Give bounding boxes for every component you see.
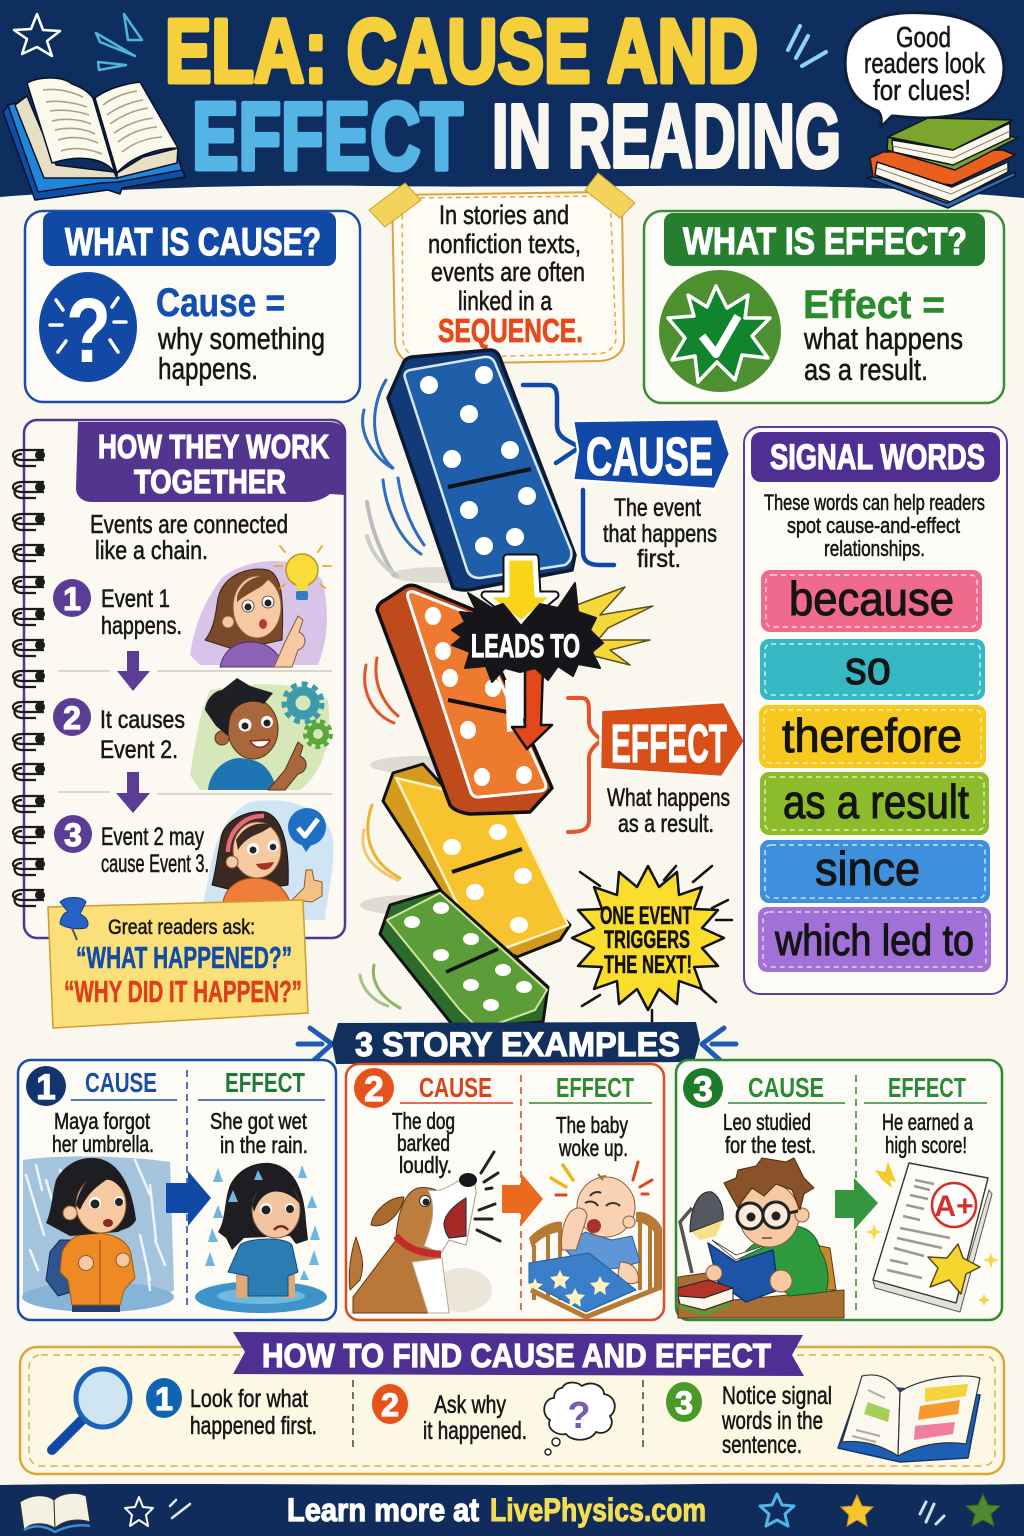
footer icon: blue star — [760, 1494, 794, 1526]
step 1: happened first. — [190, 1412, 317, 1440]
step 2 — [53, 698, 185, 764]
number badge 2: 2 — [364, 1070, 384, 1109]
footer link text: LivePhysics.com — [490, 1492, 706, 1528]
number badge 1: 1 — [36, 1068, 56, 1107]
connector: effect bracket — [568, 698, 602, 832]
domino: green — [380, 890, 548, 1030]
text: example 3: He earned a — [882, 1109, 973, 1135]
text: example 1: Maya forgot — [54, 1108, 150, 1134]
illustration: leo studying — [678, 1158, 844, 1318]
motion arcs — [360, 380, 424, 1008]
text: signal intro: spot cause-and-effect — [787, 513, 960, 538]
text: cause description — [603, 494, 717, 573]
illustration: barking dog — [349, 1152, 500, 1313]
step 3: Event 2 may — [101, 823, 204, 851]
pill: which led to: which led to — [774, 916, 974, 965]
footer icon: star outline — [125, 1497, 153, 1526]
leads to burst — [452, 583, 603, 682]
pill: since — [760, 840, 990, 903]
icon: thought bubble: ? — [567, 1395, 591, 1437]
callout: speech bubble: for clues! — [873, 75, 971, 107]
text: effect definition — [803, 283, 963, 387]
text: cause description: first. — [637, 545, 681, 573]
section heading: 3 story examples: 3 STORY EXAMPLES — [355, 1026, 680, 1064]
illustration: crying baby in crib — [527, 1162, 662, 1317]
text: effect description — [607, 784, 730, 838]
arrow: red down arrow — [505, 668, 552, 749]
title — [165, 2, 841, 190]
number badge 3: 3 — [693, 1070, 713, 1109]
label: effect: EFFECT — [611, 714, 727, 774]
icon: check burst — [659, 270, 781, 392]
arrow: step 1 to 2 — [117, 651, 150, 691]
pill: so: so — [845, 641, 891, 694]
header band — [0, 0, 1024, 198]
callout: sequence note: In stories and — [439, 200, 569, 230]
footer link text — [287, 1492, 706, 1528]
illustration: graded paper — [866, 1162, 999, 1312]
illustration: thinking girl — [190, 546, 331, 667]
label: cause and effect: CAUSE — [85, 1067, 157, 1098]
footer icon: slash — [170, 1500, 190, 1518]
callout: one event triggers the next: ONE EVENT — [600, 902, 692, 930]
arrow: yellow down arrow — [485, 558, 555, 623]
text: example 1: her umbrella. — [52, 1131, 154, 1157]
label: cause and effect: EFFECT — [556, 1072, 634, 1103]
text: effect description: What happens — [607, 784, 730, 812]
icon: blue sparks left — [96, 14, 142, 70]
text: effect definition: as a result. — [804, 352, 928, 387]
domino: yellow — [383, 764, 570, 957]
callout: sequence note: nonfiction texts, — [428, 229, 581, 259]
step 2 — [372, 1384, 527, 1445]
callout: sequence note — [369, 173, 635, 364]
heading: how they work together: TOGETHER — [134, 463, 286, 500]
label: cause and effect: EFFECT — [225, 1067, 305, 1098]
illustration: maya in rain — [22, 1156, 174, 1312]
number badge 2 — [354, 1068, 394, 1109]
heading: how they work together — [76, 422, 346, 502]
connector: cause bracket — [523, 385, 614, 565]
step 3: sentence. — [722, 1431, 802, 1459]
step 1: happens. — [101, 612, 182, 640]
illustration: maya wet — [195, 1163, 327, 1313]
step 2: It causes — [100, 706, 185, 734]
pill: because: because — [789, 572, 954, 625]
step 1: 1 — [155, 1381, 173, 1417]
text: example 3: Leo studied — [723, 1109, 811, 1135]
title: ELA: CAUSE AND — [165, 2, 758, 102]
text: cause definition: Cause = — [156, 281, 285, 325]
text: chain intro: Events are connected — [90, 509, 288, 539]
text: signal intro — [764, 490, 985, 561]
text: effect definition: Effect = — [803, 283, 945, 327]
arrow: step 2 to 3 — [116, 772, 150, 813]
heading: what is cause — [43, 212, 336, 266]
leads to burst: LEADS TO — [471, 628, 580, 664]
callout: speech bubble — [845, 13, 1004, 128]
text: example 2: The baby — [556, 1112, 628, 1138]
step 1 — [53, 579, 182, 640]
text: effect description: as a result. — [618, 810, 714, 838]
text: cause definition: why something — [157, 321, 325, 356]
step 2: 2 — [381, 1387, 399, 1423]
icon: open book — [3, 78, 185, 200]
step 3 — [666, 1382, 832, 1459]
footer icon: slashes — [920, 1502, 944, 1524]
arrow: example 2 — [502, 1173, 543, 1226]
domino: blue — [388, 350, 575, 590]
panel: how they work together — [13, 420, 346, 938]
icon: yellow sparks — [574, 587, 653, 665]
footer link text: Learn more at — [287, 1492, 479, 1528]
step 3: 3 — [64, 817, 82, 853]
callout: one event triggers the next: TRIGGERS — [604, 926, 690, 954]
heading: what is cause: WHAT IS CAUSE? — [65, 221, 321, 264]
label: effect — [600, 702, 745, 777]
step 3: Notice signal — [722, 1382, 832, 1410]
text: example 3: high score! — [885, 1132, 967, 1158]
panel: example 1 — [18, 1060, 336, 1320]
pill: therefore — [759, 705, 986, 768]
footer icon: book — [20, 1493, 90, 1532]
text: example 1: in the rain. — [220, 1132, 308, 1158]
heading: what is effect: WHAT IS EFFECT? — [683, 221, 967, 263]
step 3: words in the — [721, 1407, 823, 1435]
number badge 3 — [683, 1068, 723, 1109]
illustration: thumbs up girl — [200, 800, 333, 920]
step 3: 3 — [675, 1385, 693, 1421]
pill: which led to — [758, 907, 991, 972]
label: cause and effect: EFFECT — [888, 1072, 966, 1103]
heading: signal words — [751, 432, 1000, 482]
arrow: yellow down arrow fill — [485, 558, 555, 623]
callout: sequence note: linked in a — [458, 286, 553, 316]
text: example 3: for the test. — [725, 1132, 816, 1158]
callout: great readers ask note — [48, 898, 308, 1028]
footer icon: yellow star — [841, 1495, 873, 1526]
callout: speech bubble: readers look — [864, 48, 985, 80]
text: example 1 — [52, 1108, 308, 1158]
heading: what is effect — [664, 213, 985, 266]
label: cause: CAUSE — [586, 427, 713, 487]
text: example 1: She got wet — [210, 1108, 307, 1134]
pill: so — [760, 639, 985, 700]
icon: question mark: ? — [66, 280, 111, 382]
title: EFFECT — [192, 83, 463, 190]
icon: push pin — [60, 898, 88, 940]
icon: blue sparks right — [788, 26, 826, 66]
step 1 — [146, 1378, 317, 1440]
text: example 3 — [723, 1109, 973, 1158]
label: cause and effect: CAUSE — [748, 1072, 824, 1103]
heading: how they work together: HOW THEY WORK — [98, 428, 329, 465]
label: cause and effect — [71, 1067, 325, 1100]
callout: great readers ask note: Great readers ask: — [108, 916, 255, 939]
icon: book with highlights — [838, 1375, 980, 1462]
panel: example 2 — [346, 1064, 664, 1320]
text: chain intro: like a chain. — [95, 535, 208, 565]
arrow: example 1 — [166, 1171, 211, 1226]
panel: what is cause — [25, 211, 360, 402]
step 3: cause Event 3. — [101, 850, 209, 878]
text: example 2 — [392, 1108, 628, 1178]
icon: stack of books — [867, 118, 1017, 208]
title: IN READING — [492, 87, 841, 187]
step 2: Event 2. — [100, 736, 178, 764]
step 2: Ask why — [434, 1391, 506, 1419]
step 1: Look for what — [190, 1385, 308, 1413]
icon: star outline — [14, 14, 60, 56]
text: example 2: loudly. — [399, 1152, 452, 1178]
illustration: graded paper: A+ — [934, 1190, 974, 1223]
label: cause and effect — [400, 1072, 652, 1103]
number badge 1 — [26, 1066, 66, 1107]
text: cause description: that happens — [603, 520, 717, 548]
callout: one event triggers the next — [572, 866, 732, 1022]
text: cause definition: happens. — [158, 351, 258, 386]
text: signal intro: relationships. — [824, 536, 925, 561]
label: cause — [573, 419, 730, 489]
text: example 2: woke up. — [558, 1135, 628, 1161]
text: cause description: The event — [614, 494, 701, 522]
callout: great readers ask note: “WHY DID IT HAPPEN?” — [64, 974, 302, 1009]
step 2: 2 — [63, 700, 81, 736]
panel: signal words — [744, 427, 1007, 994]
step 1: 1 — [63, 581, 81, 617]
step 1: Event 1 — [101, 585, 170, 613]
callout: sequence note: events are often — [431, 257, 585, 287]
callout: one event triggers the next: THE NEXT! — [604, 951, 692, 979]
icon: magnifier — [52, 1369, 130, 1450]
text: chain intro — [90, 509, 288, 565]
panel: example 3 — [676, 1060, 1002, 1320]
notebook spirals — [13, 450, 45, 906]
text: example 2: barked — [397, 1130, 450, 1156]
arrow: example 3 — [835, 1178, 878, 1230]
pill: as a result: as a result — [783, 775, 969, 828]
panel: how to find cause and effect — [20, 1332, 1004, 1474]
heading banner: HOW TO FIND CAUSE AND EFFECT — [262, 1337, 771, 1374]
callout: speech bubble: Good — [896, 22, 951, 54]
label: cause and effect — [728, 1072, 987, 1103]
footer icon: green star — [966, 1494, 1000, 1526]
text: effect definition: what happens — [803, 321, 963, 356]
label: cause and effect: CAUSE — [419, 1072, 492, 1103]
illustration: pointing boy — [190, 678, 331, 790]
pill: therefore: therefore — [782, 709, 962, 762]
step 2: it happened. — [423, 1417, 527, 1445]
icon: question mark — [39, 272, 137, 382]
step 3 — [54, 815, 209, 878]
text: cause definition — [156, 281, 325, 386]
callout: great readers ask note: “WHAT HAPPENED?” — [76, 940, 292, 975]
ground shadows — [360, 567, 490, 915]
pill: because — [761, 570, 982, 632]
callout: sequence note: SEQUENCE. — [438, 312, 583, 349]
domino: orange — [377, 585, 552, 814]
panel: what is effect — [644, 211, 1004, 403]
footer band — [0, 1484, 1024, 1536]
text: example 2: The dog — [392, 1108, 455, 1134]
icon: thought bubble — [544, 1382, 615, 1455]
pill: since: since — [815, 842, 920, 895]
